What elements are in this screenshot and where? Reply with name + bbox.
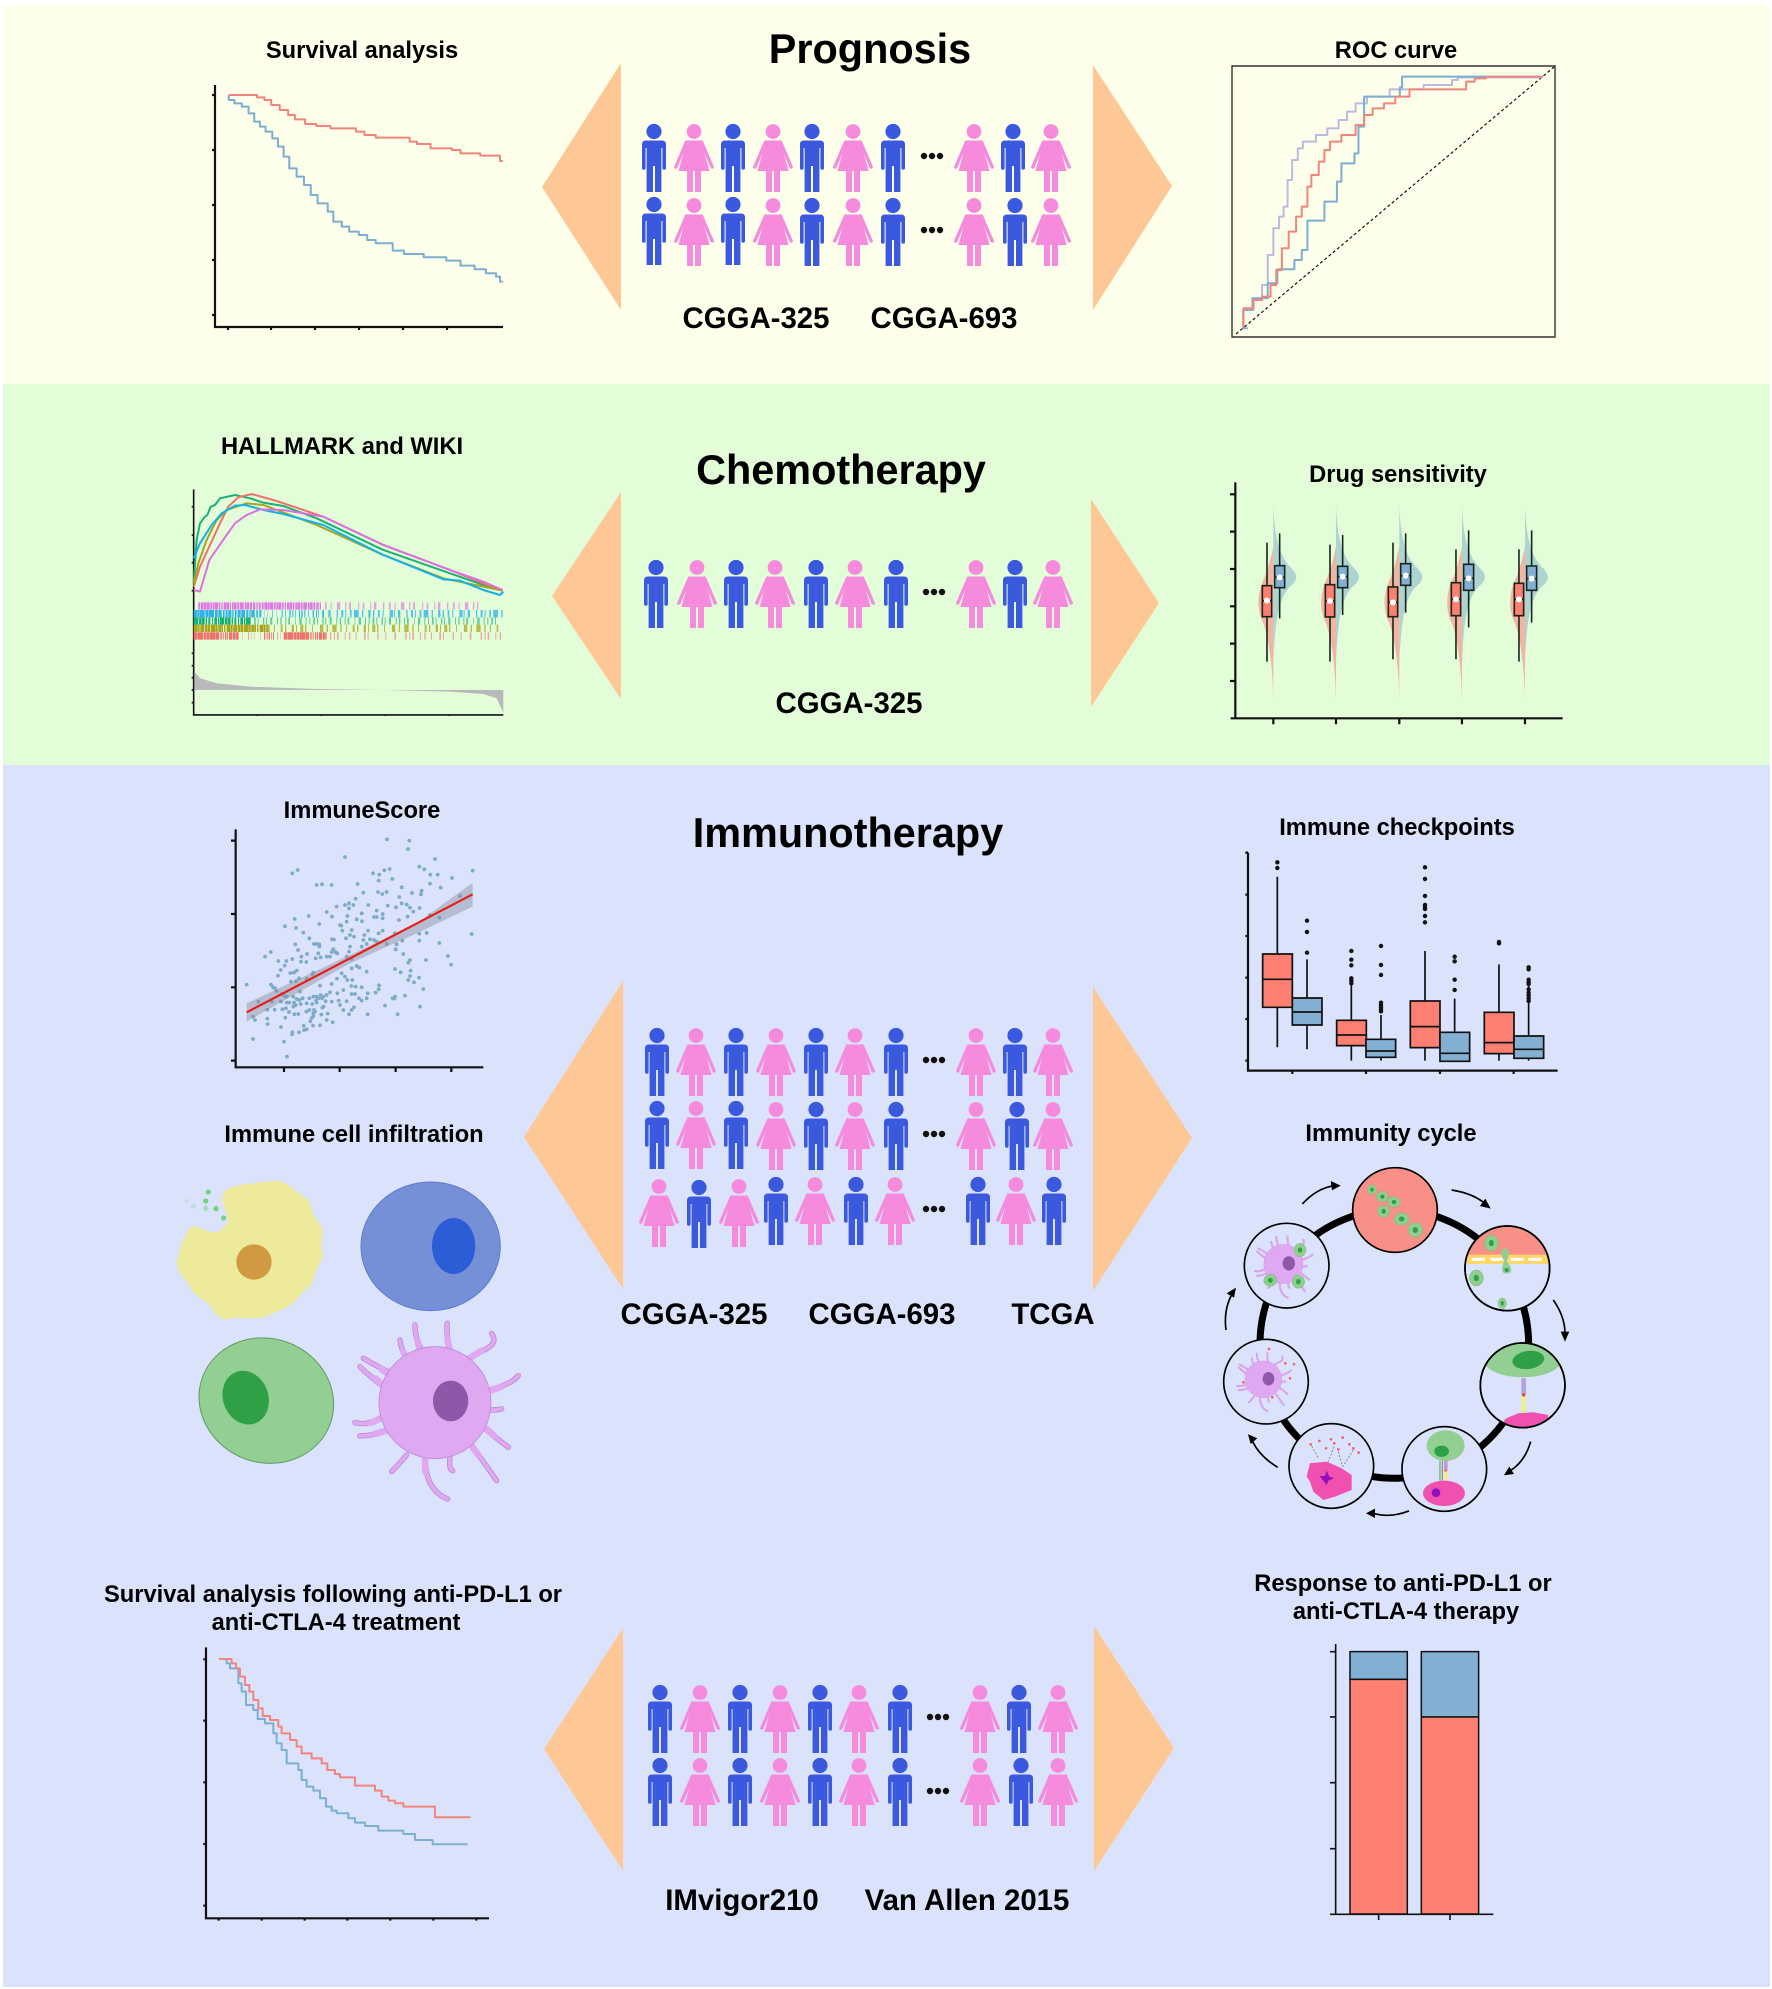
chart: response stacked bars — [1330, 1644, 1493, 1920]
heading: Response to anti-PD-L1 or anti-CTLA-4 therapy: Response to anti-PD-L1 or — [1254, 1571, 1552, 1597]
step: antigen presentation — [1255, 1236, 1312, 1298]
heading: HALLMARK and WIKI: HALLMARK and WIKI — [221, 434, 463, 460]
step: T cells in blood — [1353, 1168, 1437, 1252]
people: CGGA-325 cohort — [644, 560, 1071, 628]
heading: Drug sensitivity: Drug sensitivity — [1309, 462, 1488, 488]
arrow: right triangle — [1094, 1626, 1174, 1871]
chart: GSEA enrichment — [192, 489, 504, 716]
chart: survival curves — [212, 85, 503, 330]
heading: Immune checkpoints: Immune checkpoints — [1279, 815, 1515, 841]
chart: survival after immunotherapy — [203, 1647, 489, 1921]
people: CGGA cohorts — [642, 124, 1069, 266]
icon: T cell — [181, 1319, 351, 1482]
heading: ImmuneScore: ImmuneScore — [284, 798, 440, 824]
arrow: left triangle — [552, 492, 621, 699]
icon: dendritic cell — [355, 1323, 518, 1499]
heading: Survival analysis following anti-PD-L1 or anti-CTLA-4 treatment: anti-CTLA-4 treatment — [212, 1610, 460, 1636]
ranked metric area — [194, 672, 503, 713]
heading: Response to anti-PD-L1 or anti-CTLA-4 therapy: anti-CTLA-4 therapy — [1293, 1599, 1520, 1625]
arrows: cycle direction — [1225, 1181, 1569, 1518]
illustration: immune cells — [177, 1181, 518, 1499]
panel: immunotherapy — [3, 765, 1770, 1987]
step: T cell recognition — [1423, 1430, 1465, 1506]
arrow: left triangle — [542, 63, 621, 310]
label: CGGA-693: CGGA-693 — [808, 1298, 956, 1331]
arrow: right triangle — [1093, 987, 1192, 1291]
heading: Survival analysis: Survival analysis — [266, 38, 458, 64]
chart: ROC curve — [1232, 66, 1555, 337]
label: CGGA-325: CGGA-325 — [682, 302, 830, 335]
title: Chemotherapy: Chemotherapy — [696, 447, 986, 493]
people: IMvigor210 and Van Allen cohorts — [648, 1685, 1076, 1826]
heading: Survival analysis following anti-PD-L1 or anti-CTLA-4 treatment: Survival analysis following anti-PD-L1 or — [104, 1582, 562, 1608]
label: TCGA: TCGA — [1011, 1298, 1095, 1331]
label: CGGA-325: CGGA-325 — [776, 687, 922, 720]
heading: Immunity cycle: Immunity cycle — [1305, 1121, 1477, 1147]
chart: drug sensitivity violin and box plots — [1230, 482, 1563, 724]
label: CGGA-693: CGGA-693 — [870, 302, 1018, 335]
diagram: cancer immunity cycle — [1224, 1168, 1569, 1518]
panel: prognosis — [3, 5, 1770, 384]
label: Van Allen 2015: Van Allen 2015 — [865, 1884, 1069, 1917]
step: antigen release — [1237, 1348, 1295, 1411]
people: CGGA and TCGA cohorts — [641, 1028, 1071, 1248]
label: IMvigor210: IMvigor210 — [665, 1884, 819, 1917]
label: CGGA-325: CGGA-325 — [620, 1298, 768, 1331]
step: tumor cell killing — [1307, 1436, 1360, 1500]
icon: B cell — [361, 1182, 500, 1311]
arrow: left triangle — [524, 981, 623, 1289]
title: Immunotherapy: Immunotherapy — [693, 810, 1003, 856]
arrow: left triangle — [544, 1628, 623, 1871]
step: extravasation — [1463, 1225, 1550, 1311]
title: Prognosis: Prognosis — [769, 26, 971, 72]
arrow: right triangle — [1093, 65, 1172, 310]
rug plot — [194, 606, 504, 636]
heading: ROC curve: ROC curve — [1335, 38, 1457, 64]
heading: Immune cell infiltration: Immune cell infiltration — [224, 1122, 484, 1148]
chart: ImmuneScore scatter — [231, 829, 483, 1072]
panel: chemotherapy — [3, 384, 1770, 765]
icon: macrophage — [177, 1181, 323, 1320]
step: T cell priming — [1480, 1343, 1565, 1428]
chart: immune checkpoints box plots — [1245, 853, 1558, 1074]
arrow: right triangle — [1091, 499, 1159, 707]
